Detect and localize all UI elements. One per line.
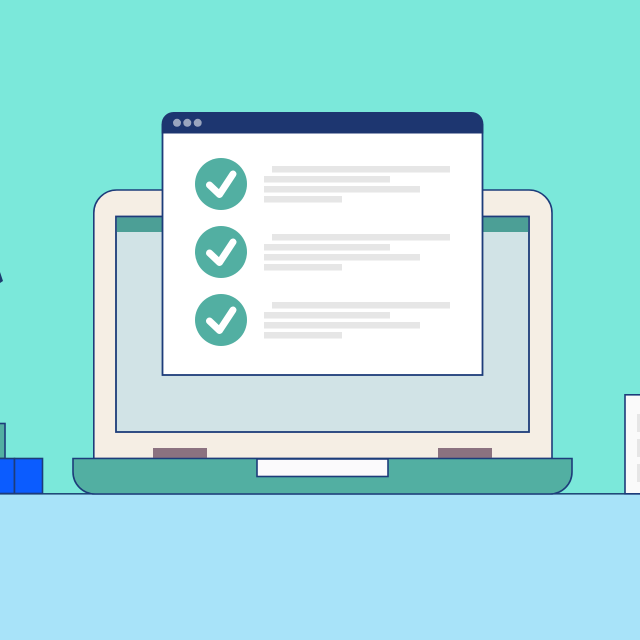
window body (162, 125, 482, 375)
laptop base (73, 458, 572, 494)
laptop notch (257, 459, 388, 476)
laptop hinges (153, 448, 492, 458)
laptop screen (116, 216, 529, 432)
icon: partial dark shape at left edge (0, 272, 3, 283)
checklist row 3 (195, 294, 450, 346)
laptop (73, 190, 572, 494)
checklist window (162, 112, 483, 375)
laptop lid (94, 190, 552, 458)
checklist row 2 (195, 226, 450, 278)
right document (625, 395, 640, 494)
ground band (0, 493, 640, 640)
checklist row 1 (195, 158, 450, 210)
window control dots (173, 119, 202, 127)
window title bar (162, 112, 483, 134)
left stacked boxes (0, 424, 42, 494)
